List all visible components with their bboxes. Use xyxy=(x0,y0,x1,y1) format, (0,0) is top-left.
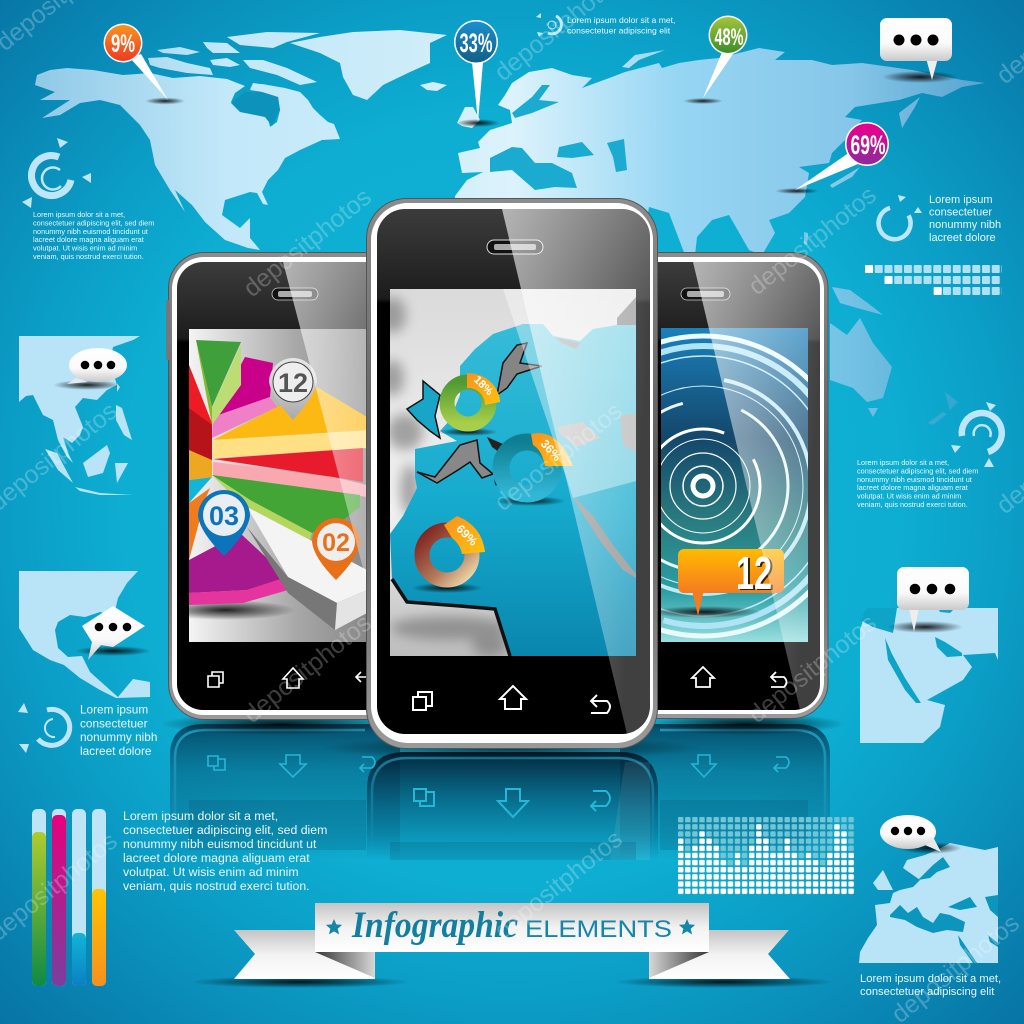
3D map: top right island xyxy=(617,297,636,328)
pin: 33% xyxy=(454,20,500,127)
ribbon: main band xyxy=(315,903,709,952)
ribbon: left tail xyxy=(234,930,375,979)
icon: top-left target xyxy=(22,138,91,208)
star: right xyxy=(679,919,695,934)
speech bubble: Asia xyxy=(53,348,127,390)
ribbon: right fold xyxy=(649,952,709,978)
pin: 33%: 33% xyxy=(460,28,492,58)
text: top-left description: Lorem ipsum dolor sit a met, xyxy=(33,210,125,219)
bar chart: four vertical bars xyxy=(32,809,106,986)
3D map: Red Sea xyxy=(572,495,636,578)
title: Infographic: Infographic xyxy=(351,905,518,946)
speaker: right xyxy=(681,288,730,300)
pin: 03: 03 xyxy=(209,501,239,531)
watermarks: depositphotos xyxy=(743,609,882,729)
pin: 69%: 69% xyxy=(850,130,886,160)
donut chart: 18% xyxy=(438,373,500,436)
text: lower description: lacreet dolore magna aliguam erat xyxy=(123,851,310,865)
pin: 12: 12 xyxy=(278,368,308,398)
text: lower-left description: lacreet dolore xyxy=(80,744,152,758)
text: right description: consectetuer xyxy=(929,206,992,218)
text: right description: lacreet dolore xyxy=(929,232,996,244)
speaker: left xyxy=(272,288,318,300)
speech bubble: top right xyxy=(880,18,958,83)
map: North America xyxy=(35,68,340,250)
screen glare band xyxy=(503,289,636,498)
watermarks: depositphotos xyxy=(489,825,628,945)
text: mid right description: Lorem ipsum dolor sit a met, xyxy=(857,458,949,467)
icon: right refresh ring xyxy=(873,195,922,244)
side buttons: left xyxy=(166,300,170,360)
text: lower description: veniam, quis nostrud exerci tution. xyxy=(123,879,310,893)
reflection: buttons xyxy=(208,755,789,817)
pixel grid: upper right xyxy=(865,265,1002,298)
ribbon: left fold xyxy=(315,952,375,978)
text: Europe caption: Lorem ipsum dolor sit a met, xyxy=(860,973,1001,985)
icon: lower-left target xyxy=(18,703,70,753)
watermarks: depositphotos xyxy=(238,183,377,303)
speech bubble: America xyxy=(75,606,151,660)
sea: Baltic xyxy=(512,85,559,118)
donut chart: 36%: 36% xyxy=(538,437,564,464)
map: Novaya Zemlya xyxy=(622,50,665,68)
3D map: Baltic xyxy=(497,343,542,395)
3D map: coast walls xyxy=(392,579,510,656)
text: top-left description: nonummy nibh euismod tincidunt ut xyxy=(33,227,148,236)
inset map: Middle East xyxy=(860,567,998,743)
star: left xyxy=(326,919,342,934)
3D map: Mediterranean xyxy=(417,440,493,483)
map: Sakhalin xyxy=(899,97,920,128)
watermarks: depositphotos xyxy=(743,181,882,301)
callout: 12: 12 xyxy=(736,547,772,599)
sea: Black Sea xyxy=(557,142,594,158)
title: ELEMENTS: ELEMENTS xyxy=(525,916,672,943)
3D map: Britain xyxy=(407,381,440,438)
text: mid right description: consectetuer adipiscing elit, sed diem xyxy=(857,466,978,476)
text: top description: Lorem ipsum dolor sit a met, xyxy=(567,15,675,25)
speech bubble: Middle East xyxy=(887,567,969,633)
left phone xyxy=(166,252,368,720)
text: top-left description: lacreet dolore magna aliguam erat xyxy=(33,235,144,244)
text: top-left description: consectetuer adipiscing elit, sed diem xyxy=(33,218,154,228)
speaker: center xyxy=(487,240,543,254)
pin: 02 xyxy=(312,518,360,580)
callout: 12: 12 xyxy=(738,548,774,600)
phone reflections xyxy=(170,724,830,860)
pin: 9%: 9% xyxy=(111,30,135,58)
world map percentage pins xyxy=(104,16,958,194)
map: Arctic islands xyxy=(148,32,320,92)
sea: Hudson Bay xyxy=(231,92,280,126)
text: lower description: volutpat. Ut wisis enim ad minim xyxy=(123,865,299,879)
speech bubble: Europe xyxy=(880,815,962,854)
pin: 02: 02 xyxy=(322,529,350,557)
watermarks: depositphotos xyxy=(489,397,628,517)
nav icons: center phone xyxy=(413,686,610,713)
text: lower-left description: nonummy nibh xyxy=(80,730,157,744)
reflection: center phone xyxy=(367,752,658,860)
sea: Mediterranean xyxy=(490,147,577,190)
glare: left phone xyxy=(283,262,366,570)
glare: center phone xyxy=(502,209,650,734)
donut chart: 36% xyxy=(494,433,573,506)
pin: 12 xyxy=(269,358,317,420)
text: right description: Lorem ipsum xyxy=(929,194,993,206)
reflection: right phone xyxy=(620,724,830,860)
3D map: soft shadows xyxy=(378,297,510,657)
phone body: center xyxy=(366,198,658,748)
text: mid right description: lacreet dolore magna aliguam erat xyxy=(857,483,968,492)
map: Japan xyxy=(830,167,860,188)
donut chart: 18%: 18% xyxy=(471,374,495,398)
text: lower description: nonummy nibh euismod tincidunt ut xyxy=(123,837,317,851)
inset map: Southeast Asia xyxy=(19,336,140,495)
map: Indonesia and New Guinea xyxy=(804,232,883,315)
inset map: Central America xyxy=(19,571,151,698)
icon: mid right target xyxy=(951,402,1002,467)
text: mid right description: nonummy nibh euismod tincidunt ut xyxy=(857,475,972,484)
3D map: land xyxy=(390,324,636,656)
inland seas xyxy=(231,85,627,190)
map: Britain xyxy=(457,107,480,128)
pin: 69% xyxy=(775,122,889,194)
text: mid right description: volutpat. Ut wisis enim ad minim xyxy=(857,492,961,500)
text: top-left description: volutpat. Ut wisis enim ad minim xyxy=(33,244,137,252)
phone body: left xyxy=(168,252,408,720)
text: Europe caption: consectetuer adipiscing elit xyxy=(860,986,995,998)
pin: 9% xyxy=(104,24,185,104)
map: Iceland xyxy=(420,82,447,91)
phone shadow xyxy=(322,736,702,760)
text: mid right description: veniam, quis nostrud exerci tution. xyxy=(857,500,968,509)
text: top description: consectetuer adipiscing elit xyxy=(567,26,671,36)
callout: 12 xyxy=(661,549,784,618)
center phone xyxy=(366,198,658,748)
right phone xyxy=(656,252,828,719)
text: lower-left description: Lorem ipsum xyxy=(80,702,148,716)
text: lower description: consectetuer adipiscing elit, sed diem xyxy=(123,823,327,837)
text: top-left description: veniam, quis nostrud exerci tution. xyxy=(33,252,144,261)
3D map: Black Sea xyxy=(557,422,600,447)
screen: 3D map xyxy=(378,289,636,657)
dot matrix equalizer xyxy=(678,817,856,895)
pin: 03 xyxy=(198,490,250,556)
map: Greenland xyxy=(290,30,447,100)
pin: 48%: 48% xyxy=(714,24,744,51)
donut chart: 69%: 69% xyxy=(453,522,480,549)
map: New Zealand xyxy=(928,392,958,425)
map: Australia xyxy=(830,318,892,417)
icon: top small target xyxy=(536,13,561,37)
sea: Caspian xyxy=(607,139,627,172)
donut chart: 69% xyxy=(411,516,485,593)
pin: 48% xyxy=(683,16,748,104)
reflection: outlines xyxy=(175,730,825,855)
inset map: Europe xyxy=(859,815,998,963)
glare: right phone xyxy=(693,262,820,710)
world map xyxy=(35,30,985,425)
text: lower-left description: consectetuer xyxy=(80,716,148,730)
ribbon shadows xyxy=(190,976,410,988)
reflection: left phone xyxy=(170,724,400,860)
side phone shadows xyxy=(160,713,845,735)
3D map: Caspian xyxy=(620,413,636,452)
phone body: right xyxy=(600,252,828,718)
reflection: screen bands xyxy=(189,800,808,860)
ribbon banner xyxy=(190,903,834,988)
chart: pie slices xyxy=(189,340,366,630)
screen: concentric circles xyxy=(661,328,808,642)
watermarks: depositphotos xyxy=(238,609,377,729)
nav icons: left phone xyxy=(208,668,369,688)
reflection: glare xyxy=(610,762,650,860)
nav icons: right phone xyxy=(692,667,786,687)
3D map: northern coast xyxy=(555,337,580,349)
ribbon: right tail xyxy=(649,930,790,979)
text: lower description: Lorem ipsum dolor sit a met, xyxy=(123,809,278,823)
map: Eurasia and Africa xyxy=(455,48,985,260)
text: right description: nonummy nibh xyxy=(929,219,1001,231)
screen: pie chart xyxy=(189,329,366,642)
